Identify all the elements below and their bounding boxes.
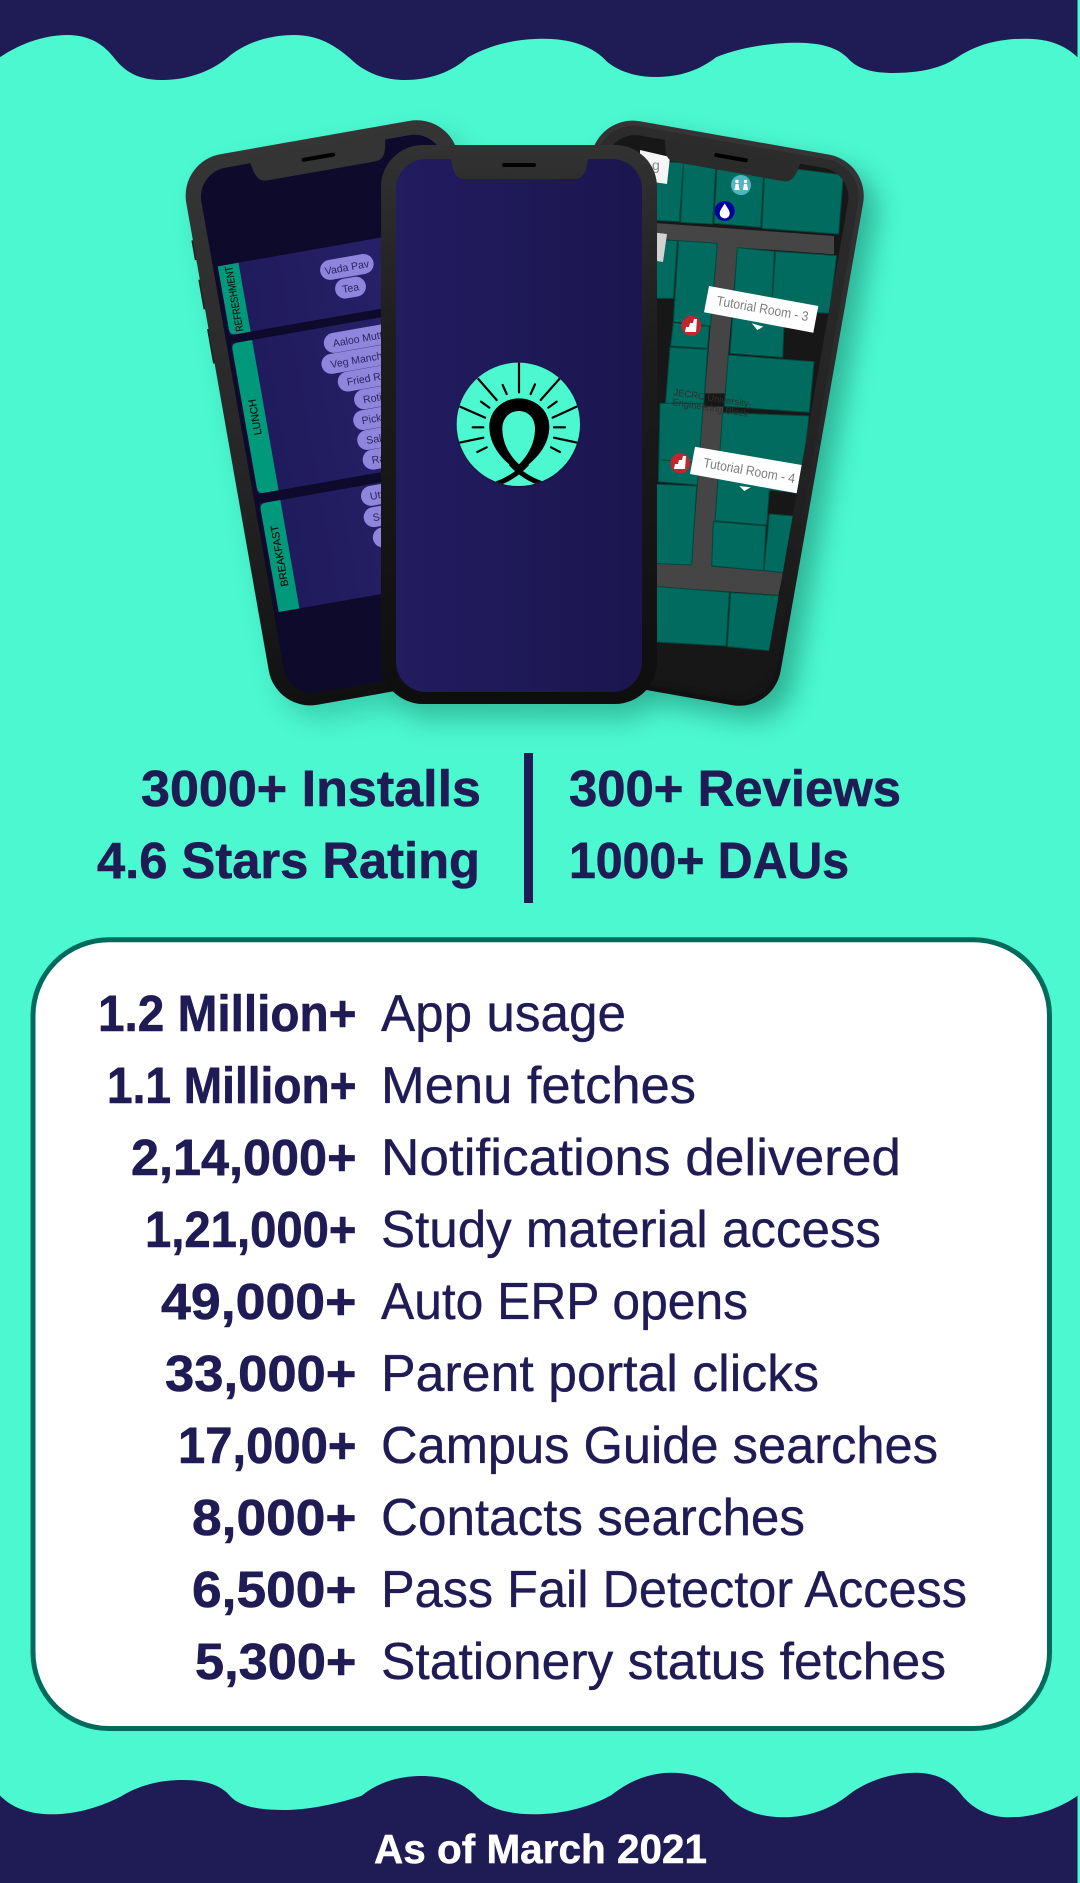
row: study material [145, 1201, 881, 1259]
phone: food menu (left) [186, 120, 455, 706]
row: auto ERP: 49,000+ [161, 1273, 356, 1330]
row: menu fetches: 1.1 Million+ [107, 1057, 356, 1114]
icon: restroom marker [731, 175, 751, 195]
menu panel: lunch: Veg Manchu [330, 349, 389, 371]
map tab fragments [640, 150, 670, 184]
divider [524, 753, 533, 903]
row: notifications: 2,14,000+ [131, 1129, 356, 1186]
row: contacts: Contacts searches [381, 1489, 805, 1547]
row: notifications: Notifications delivered [381, 1129, 901, 1187]
phone shadows [190, 127, 884, 726]
phone: campus map (right): g [652, 157, 660, 173]
row: pass fail detector: 6,500+ [192, 1561, 356, 1618]
row: app usage [98, 985, 626, 1043]
map label: JECRC University- [673, 387, 752, 410]
map rooms upper [650, 157, 843, 412]
icon: stairs marker lower [670, 453, 690, 473]
menu panel: breakfast [260, 482, 381, 612]
stat: installs: 3000+ Installs [141, 760, 481, 817]
map label: Engineering Block [672, 397, 749, 420]
row: campus guide: 17,000+ [178, 1417, 356, 1474]
row: contacts: 8,000+ [192, 1489, 356, 1546]
row: stationery: 5,300+ [195, 1633, 356, 1690]
menu panel: lunch: Aaloo Mutt [332, 329, 384, 350]
menu panel: lunch: Fried Ric [346, 369, 389, 389]
stat: DAUs: 1000+ DAUs [569, 832, 849, 889]
menu panel: lunch: Roti [362, 391, 383, 406]
row: stationery: Stationery status fetches [381, 1633, 946, 1691]
tooltip: Tutorial Room 3: Tutorial Room - 3 [715, 293, 810, 324]
row: menu fetches [107, 1057, 696, 1115]
row: parent portal: 33,000+ [165, 1345, 356, 1402]
bottom wave banner [0, 1773, 1078, 1883]
tooltip: Tutorial Room 4 [690, 447, 802, 493]
footer date: As of March 2021 [374, 1826, 707, 1872]
map rooms lower [650, 403, 809, 651]
row: parent portal [165, 1345, 819, 1403]
tooltip: Tutorial Room 3 [704, 286, 818, 333]
row: app usage: 1.2 Million+ [98, 985, 356, 1042]
icon: app logo [457, 362, 580, 486]
phone: splash screen (centre) [381, 145, 657, 704]
top wave banner [0, 0, 1078, 80]
menu panel: breakfast: BREAKFAST [269, 524, 291, 587]
menu panel: lunch [232, 317, 381, 494]
row: pass fail detector: Pass Fail Detector Access [381, 1561, 967, 1619]
menu panel: refreshment: REFRESHMENT [223, 265, 246, 332]
menu panel: refreshment: Vada Pav [324, 258, 371, 278]
stat: rating: 4.6 Stars Rating [97, 832, 480, 889]
menu panel: lunch: Ra [371, 452, 386, 467]
headline stats [97, 753, 901, 903]
row: notifications [131, 1129, 901, 1187]
panel: usage statistics [33, 940, 1050, 1728]
row: contacts [192, 1489, 805, 1547]
row: campus guide: Campus Guide searches [381, 1417, 938, 1475]
row: parent portal: Parent portal clicks [381, 1345, 819, 1403]
menu panel: lunch: LUNCH [246, 398, 265, 436]
row: study material: Study material access [381, 1201, 881, 1259]
row: study material: 1,21,000+ [145, 1201, 356, 1258]
phone: campus map (right) [594, 120, 864, 706]
menu panel: lunch: Pickl [361, 412, 385, 427]
row: auto ERP: Auto ERP opens [381, 1273, 748, 1331]
menu panel: refreshment [218, 238, 381, 336]
icon: stairs marker [681, 316, 701, 336]
menu panel: breakfast: Utt [369, 489, 385, 503]
phones group [178, 100, 890, 726]
menu panel: refreshment: Tea [341, 281, 360, 296]
menu panel: lunch: Sala [365, 432, 388, 447]
icon: water marker [715, 201, 735, 221]
row: app usage: App usage [381, 985, 626, 1043]
stat: reviews: 300+ Reviews [569, 760, 901, 817]
row: auto ERP [161, 1273, 748, 1331]
row: menu fetches: Menu fetches [381, 1057, 696, 1115]
tooltip: Tutorial Room 4: Tutorial Room - 4 [702, 455, 797, 486]
menu panel: breakfast: Sa [372, 510, 387, 524]
